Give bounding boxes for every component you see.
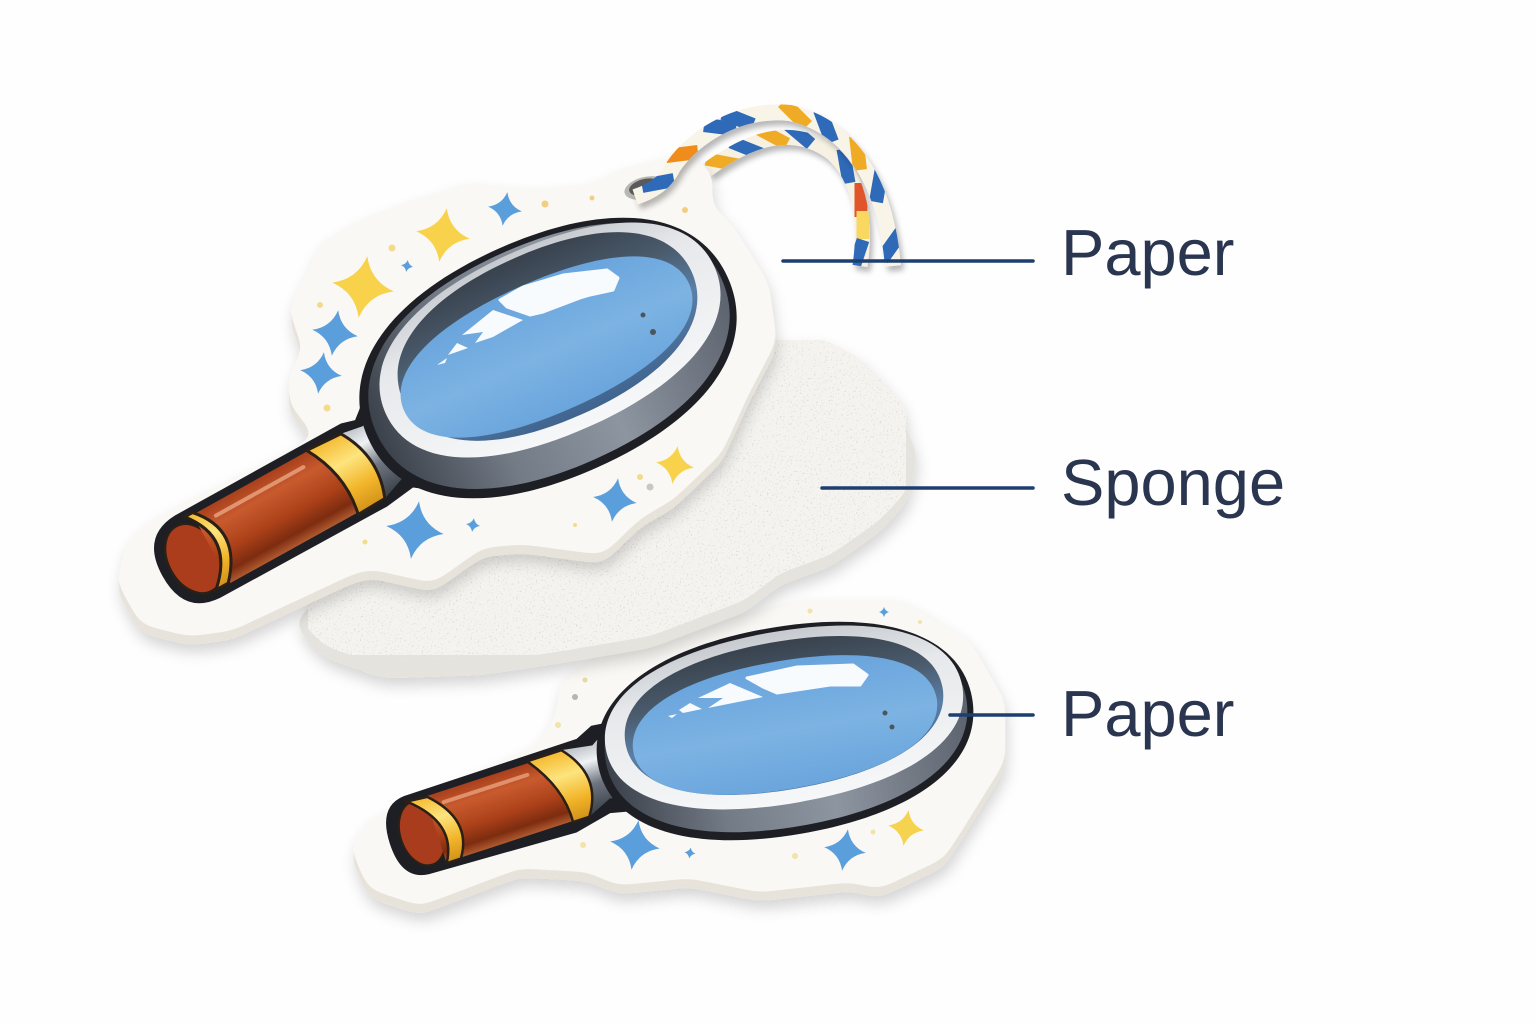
top paper sparkles bbox=[297, 190, 696, 563]
layered paper and sponge diagram bbox=[116, 104, 1282, 926]
large magnifying glass handle bbox=[137, 371, 486, 639]
top paper shape bbox=[132, 168, 762, 631]
bottom paper sparkles bbox=[555, 607, 926, 874]
label text: Paper bbox=[1061, 677, 1234, 750]
small magnifying glass handle bbox=[374, 706, 684, 891]
leader line bbox=[783, 259, 1033, 263]
sponge layer bbox=[308, 340, 906, 667]
rope front strand bbox=[635, 102, 902, 266]
bottom paper layer bbox=[365, 596, 992, 901]
label text: Paper bbox=[1061, 216, 1234, 289]
top paper layer bbox=[132, 168, 777, 639]
label text: Sponge bbox=[1061, 446, 1285, 519]
leader line bbox=[950, 713, 1033, 717]
rope back strand bbox=[706, 122, 863, 270]
punched hole bbox=[622, 172, 668, 204]
large magnifying glass head bbox=[319, 168, 777, 548]
bottom paper shape bbox=[365, 613, 992, 901]
leader line bbox=[822, 486, 1033, 490]
small magnifying glass head bbox=[580, 596, 990, 866]
